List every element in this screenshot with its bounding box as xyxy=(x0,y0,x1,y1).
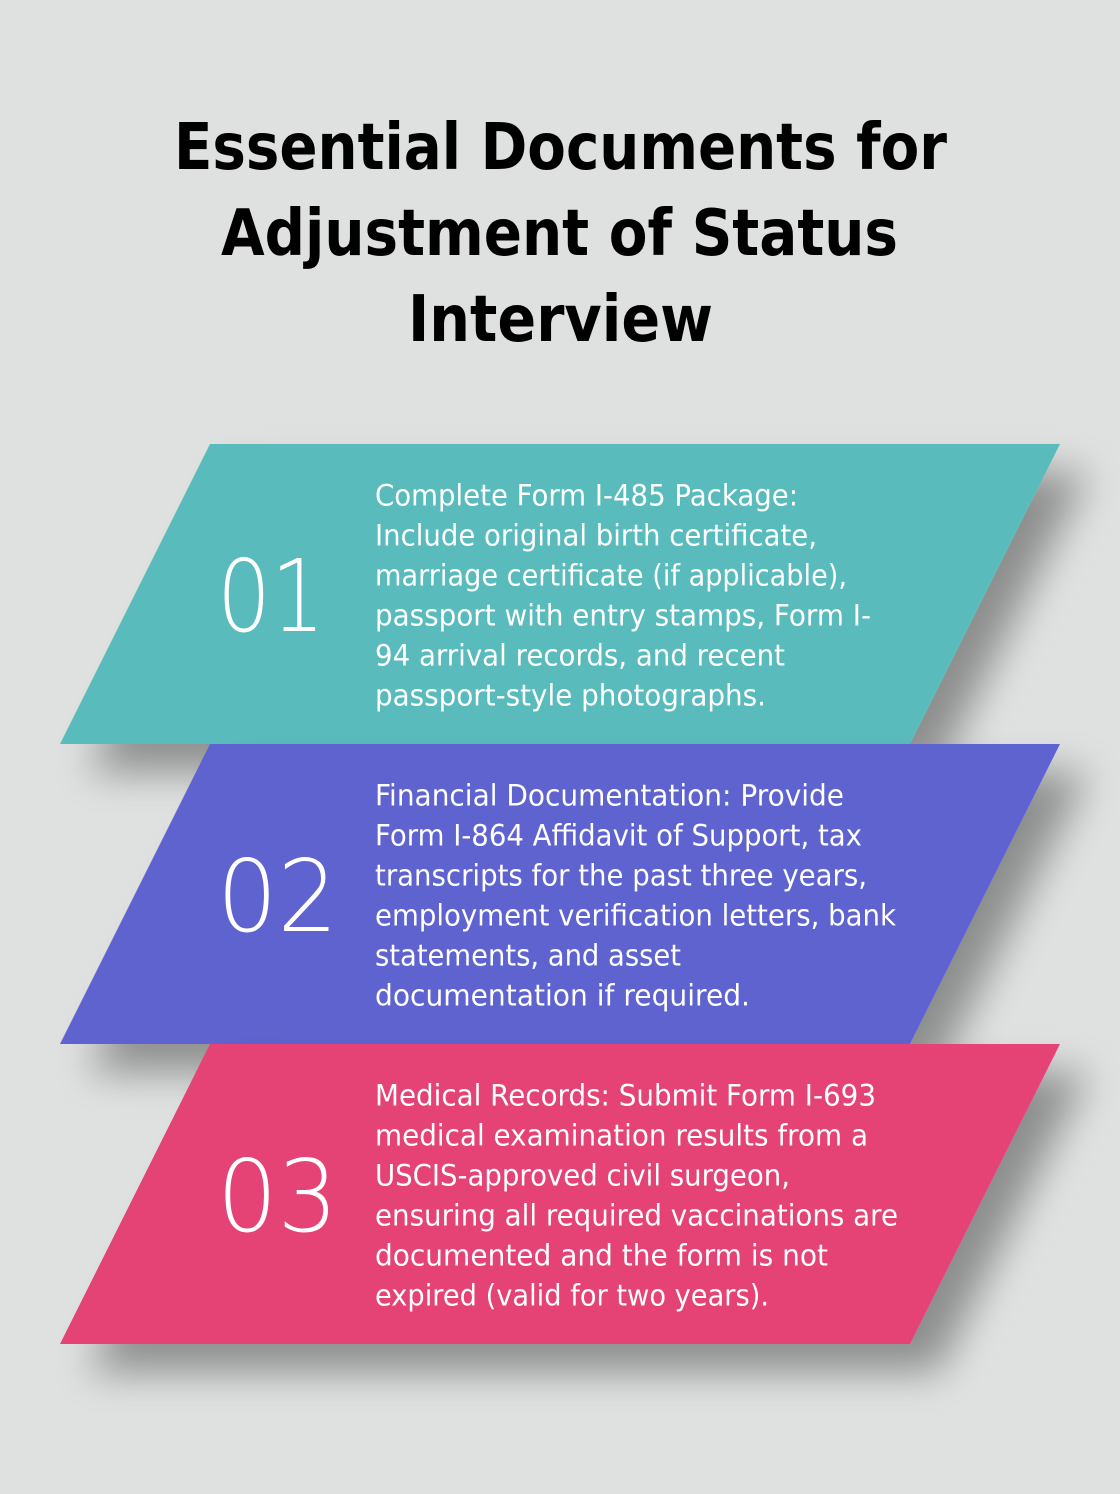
title: Essential Documents for xyxy=(174,111,947,185)
number 01: 01 xyxy=(217,538,325,655)
text: Form I-485 package: 94 arrival records, and recent xyxy=(375,638,785,672)
text: Form I-485 package: Complete Form I-485 Package: xyxy=(375,478,798,512)
teal parallelogram xyxy=(60,444,1060,744)
text: Form I-485 package: passport with entry stamps, Form I- xyxy=(375,598,871,632)
panel: financial documentation xyxy=(60,744,1060,1044)
pink parallelogram xyxy=(60,1044,1060,1344)
text: Form I-485 package xyxy=(375,478,871,712)
text: medical records: documented and the form is not xyxy=(375,1238,828,1272)
text: medical records: Medical Records: Submit Form I-693 xyxy=(375,1078,876,1112)
text: financial documentation: employment verification letters, bank xyxy=(375,898,896,932)
text: medical records: expired (valid for two years). xyxy=(375,1278,769,1312)
number 02: 02 xyxy=(217,838,338,955)
number 03: 03 xyxy=(217,1138,338,1255)
title xyxy=(174,111,947,357)
text: Form I-485 package: passport-style photographs. xyxy=(375,678,766,712)
text: Form I-485 package: Include original birth certificate, xyxy=(375,518,817,552)
text: financial documentation: documentation if required. xyxy=(375,978,750,1012)
title: Interview xyxy=(408,283,713,357)
text: medical records: ensuring all required vaccinations are xyxy=(375,1198,898,1232)
text: financial documentation: statements, and asset xyxy=(375,938,681,972)
text: financial documentation: transcripts for the past three years, xyxy=(375,858,867,892)
text: financial documentation: Form I-864 Affidavit of Support, tax xyxy=(375,818,862,852)
text: medical records: medical examination results from a xyxy=(375,1118,868,1152)
text: financial documentation xyxy=(375,778,896,1012)
text: medical records: USCIS-approved civil surgeon, xyxy=(375,1158,790,1192)
panel: Form I-485 package xyxy=(60,444,1060,744)
title: Adjustment of Status xyxy=(221,197,898,271)
text: financial documentation: Financial Documentation: Provide xyxy=(375,778,844,812)
text: medical records xyxy=(375,1078,898,1312)
text: Form I-485 package: marriage certificate (if applicable), xyxy=(375,558,847,592)
panel: medical records xyxy=(60,1044,1060,1344)
purple parallelogram xyxy=(60,744,1060,1044)
